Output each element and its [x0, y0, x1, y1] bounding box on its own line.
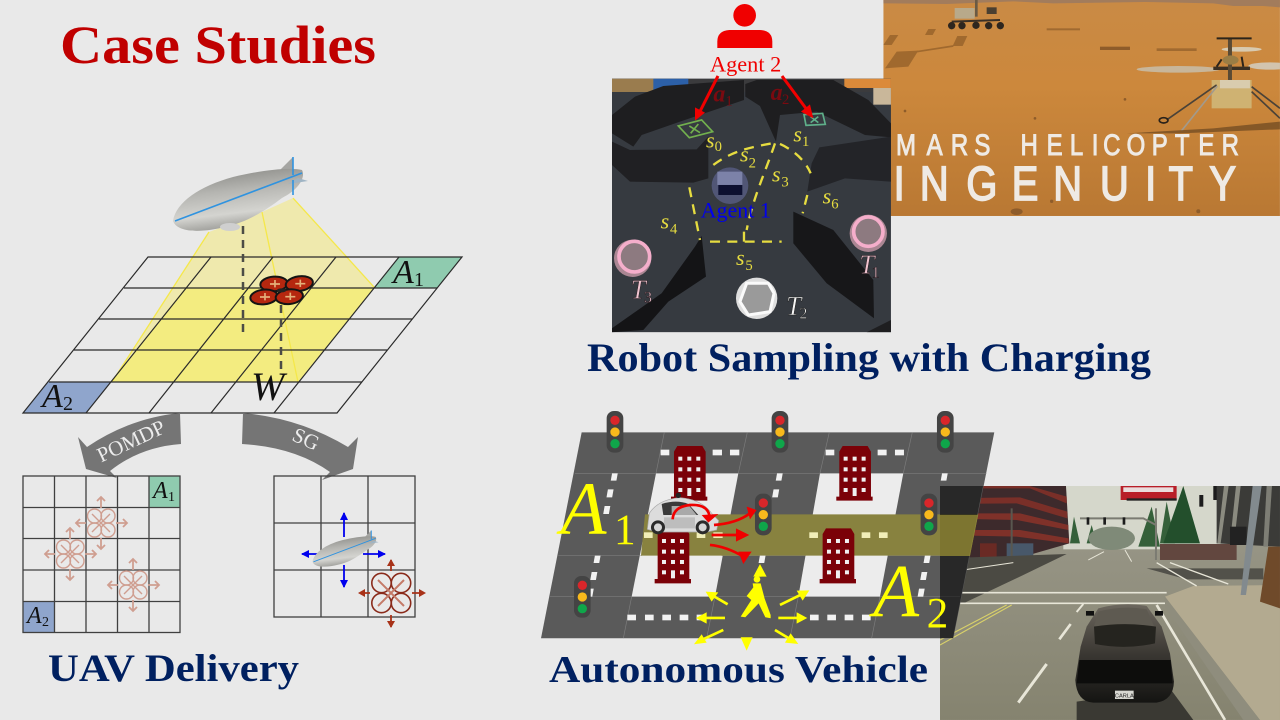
right parking structure: [1160, 486, 1280, 560]
grid labels: A: [391, 254, 414, 291]
icon: person agent 2: [717, 4, 772, 48]
action labels: 1: [725, 93, 733, 109]
grid labels: [40, 254, 424, 415]
goal labels: A: [868, 550, 920, 633]
action labels: a: [713, 82, 725, 108]
state labels: 3: [781, 175, 789, 191]
wooden post: [1260, 547, 1280, 608]
POMDP grid: A: [25, 603, 42, 629]
green landing markers: [678, 113, 825, 138]
state labels: s: [772, 162, 781, 187]
action labels: [714, 88, 788, 106]
mission title: INGENUITY: [894, 157, 1236, 211]
photo overlay: corridor: [940, 515, 978, 556]
tile lines: [550, 432, 987, 638]
charging pads: [614, 215, 887, 277]
icon: small blimp: [312, 530, 379, 567]
agent 2 label: Agent 2: [710, 52, 781, 77]
heading: UAV Delivery: UAV Delivery: [48, 647, 300, 690]
rover tracks: [883, 29, 967, 68]
street pole: [1241, 486, 1262, 595]
horizontal road band (goal corridor): [641, 514, 978, 556]
goal labels: A: [556, 467, 608, 550]
backdrop strip: [612, 79, 891, 105]
state labels: s: [793, 122, 802, 147]
dashed projection lines: [243, 226, 281, 372]
icon: ego car: [1075, 604, 1193, 720]
state labels: s: [661, 208, 669, 233]
pale lane dashes on band: [644, 532, 888, 538]
icon: rover: [948, 0, 1004, 29]
title: Case Studies: [60, 15, 376, 75]
double yellow line: [940, 605, 1012, 645]
goal labels: 2: [927, 589, 948, 637]
city block right: [798, 473, 903, 597]
objects: [556, 411, 954, 651]
yellow region boundaries: [689, 143, 811, 242]
surface stones: [904, 28, 1200, 215]
traffic signal gantry: [1012, 508, 1156, 560]
home station: [736, 278, 777, 319]
grid labels: 1: [414, 269, 424, 291]
icon: quadcopter: [250, 274, 314, 306]
panel: autonomous vehicle: [541, 411, 994, 691]
icon: self-driving car: [647, 493, 719, 534]
yellow motion arrows: [694, 564, 809, 651]
heading: Robot Sampling with Charging: Robot Sampling with Charging: [587, 335, 1151, 380]
POMDP grid: 1: [168, 490, 175, 505]
sky: [1063, 486, 1230, 549]
state labels: 1: [802, 134, 809, 150]
city block left: [632, 473, 738, 597]
road shadows: [940, 554, 1263, 604]
horizon hills: [883, 0, 1280, 7]
road markings: [940, 550, 1228, 720]
perspective grid: [23, 257, 462, 413]
action labels: 2: [782, 92, 789, 108]
arrow: SG: SG: [289, 423, 323, 455]
state labels: 6: [831, 196, 839, 212]
apartment building: [969, 486, 1070, 558]
mission title: MARS HELICOPTER: [896, 127, 1239, 162]
icon: ego car: CARLA: [1115, 693, 1134, 699]
target labels: [632, 255, 879, 319]
target labels: T: [859, 249, 876, 279]
photo: robot sampling arena: [612, 4, 891, 332]
billboard: [1121, 486, 1177, 501]
target labels: T: [631, 274, 648, 304]
icon: dark quadcopter: [358, 559, 426, 628]
target labels: 3: [644, 290, 652, 307]
state labels: 4: [670, 221, 678, 237]
heading: Autonomous Vehicle: Autonomous Vehicle: [549, 649, 928, 691]
goal labels: [556, 467, 948, 637]
state labels: s: [823, 183, 831, 208]
distant trees: [1070, 486, 1200, 547]
state labels: s: [706, 127, 715, 152]
icon: traffic lights: [574, 411, 954, 618]
icon: buildings: [655, 446, 873, 583]
icon: helicopter: [1127, 38, 1280, 133]
icon: pedestrian: [741, 576, 771, 618]
photo overlay: road shadow: [940, 486, 983, 638]
grid labels: 2: [63, 393, 73, 415]
target labels: T: [786, 291, 803, 321]
arrow: POMDP: POMDP: [93, 415, 169, 467]
icon: faded quadcopters: [45, 497, 159, 611]
goal cell A2: [23, 382, 111, 413]
road surface: [541, 432, 994, 638]
goal labels: 1: [614, 506, 636, 554]
red maneuver arrows: [673, 505, 757, 564]
target labels: 2: [799, 305, 807, 322]
POMDP grid: [23, 476, 180, 632]
state labels: s: [736, 245, 745, 270]
state labels: s: [740, 142, 749, 167]
arena walls: [612, 80, 891, 332]
target labels: 1: [872, 264, 880, 281]
arrow: POMDP: [78, 413, 181, 478]
red action arrows: [695, 76, 813, 121]
icon: blimp: [173, 157, 308, 231]
state labels: 2: [749, 156, 756, 172]
mission title: [896, 134, 1238, 202]
state labels: 5: [745, 258, 753, 274]
panel: UAV delivery: [23, 157, 462, 690]
lane dashes: [588, 450, 948, 620]
state labels: 0: [715, 139, 722, 155]
action labels: a: [771, 80, 783, 106]
pavement: [1165, 585, 1280, 720]
state labels: [661, 122, 839, 274]
arrow: SG: [242, 413, 358, 480]
photo: driving simulator view: [940, 486, 1280, 720]
photo: Mars helicopter: [883, 0, 1280, 216]
blue action arrows: [301, 512, 386, 588]
goal cell A1: [374, 257, 462, 288]
SG grid: [274, 476, 426, 628]
POMDP grid: 2: [42, 615, 49, 630]
POMDP grid: A: [151, 478, 168, 504]
agent 1 label: Agent 1: [701, 197, 771, 222]
grid labels: W: [251, 364, 288, 409]
sensor cone: [112, 198, 374, 382]
robot agent 1: [712, 167, 748, 204]
road network: [541, 432, 994, 638]
grid labels: A: [40, 378, 63, 415]
